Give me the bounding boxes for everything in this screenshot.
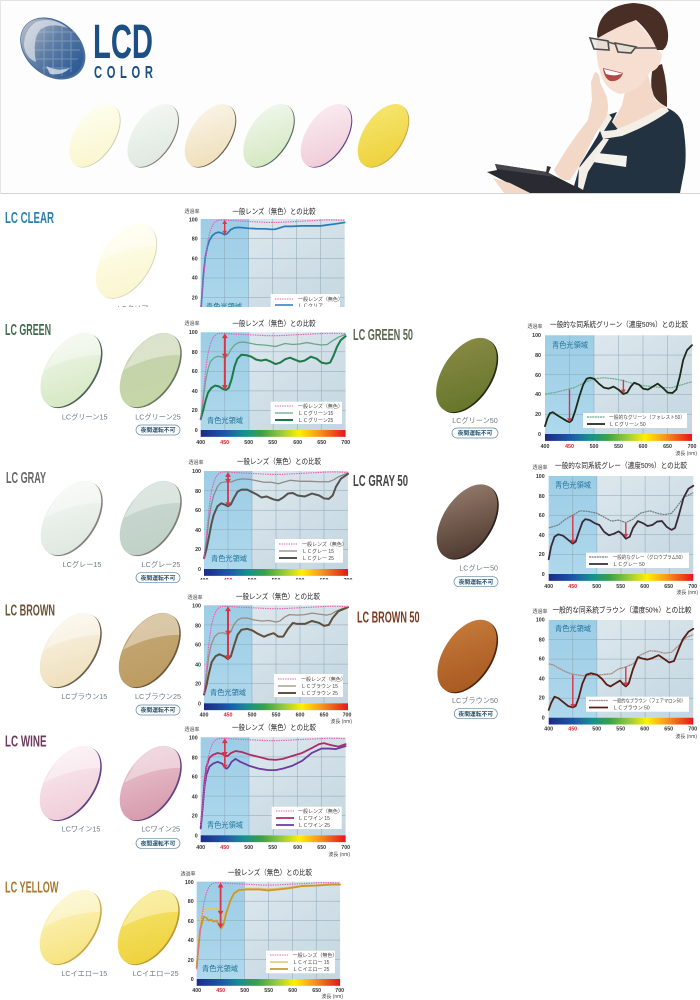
badge: no night driving: 夜間運転不可 (141, 574, 176, 582)
chart: LC brown comparison: 0 (198, 701, 201, 707)
chart: gray 50 comparison: 450 (568, 584, 577, 590)
lens label: LCイエロー15 (61, 969, 107, 978)
section: LC WINE (5, 723, 350, 858)
chart: gray 50 comparison: 400 (544, 584, 553, 590)
chart: gray 50 comparison: 一般的な同系統グレー（濃度50%）との比較 (555, 461, 688, 470)
chart: LC brown comparison: 450 (224, 712, 232, 718)
lens: green 25 (107, 322, 194, 419)
chart: green 50 comparison: 100 (532, 333, 541, 339)
chart: brown 50 comparison: 80 (539, 638, 545, 644)
chart: brown 50 comparison: 波長 (nm) (675, 733, 697, 740)
chart: LC wine comparison: 500 (244, 845, 253, 851)
chart: LC brown comparison: 40 (195, 662, 201, 668)
lens label: LCグレー15 (63, 560, 101, 569)
chart: gray 50 comparison: 一般的なグレー（グロウプラム50） (613, 554, 686, 561)
chart: LC green comparison: 40 (192, 389, 198, 395)
chart: LC green comparison: 一般レンズ（無色） (298, 403, 343, 410)
chart: LC wine comparison: 600 (293, 845, 302, 851)
chart: LC yellow comparison: 透過率 (180, 870, 196, 878)
chart: gray 50 comparison: 550 (616, 584, 625, 590)
chart: LC green comparison: 透過率 (184, 320, 200, 327)
heading: LC GRAY 50 (353, 473, 408, 490)
chart: LC brown comparison: 透過率 (187, 594, 203, 601)
chart: LC brown comparison: 一般レンズ（無色） (301, 676, 346, 683)
chart: LC gray comparison: 650 (320, 578, 328, 584)
chart: brown 50 comparison: 600 (640, 727, 649, 733)
chart: LC green comparison: 100 (189, 330, 198, 336)
chart: brown 50 comparison (532, 606, 697, 740)
heading: LC YELLOW (5, 880, 59, 896)
chart: LC wine comparison: 700 (341, 845, 350, 851)
chart: gray 50 comparison: 80 (539, 494, 545, 500)
chart: LC yellow comparison: 700 (335, 988, 344, 994)
chart: LC yellow comparison: 450 (216, 988, 225, 994)
chart: green 50 comparison: 600 (639, 444, 647, 450)
lens label: LCグレー50 (459, 564, 498, 572)
chart: green 50 comparison: 80 (535, 353, 541, 359)
chart: LC brown comparison: 650 (320, 712, 328, 718)
chart: LC gray comparison: ＬＣグレー 15 (302, 548, 334, 555)
chart: LC clear comparison: 一般レンズ（無色）との比較 (232, 207, 316, 216)
chart: LC yellow comparison: 100 (185, 880, 194, 886)
lens label: LCワイン25 (141, 824, 180, 834)
chart: LC brown comparison: 青色光領域 (210, 688, 246, 697)
chart: LC green comparison (184, 319, 350, 446)
lens: brown 25 (106, 602, 193, 699)
lens label: LCイエロー25 (133, 969, 179, 978)
logo: LCD COLOR (8, 5, 153, 92)
chart: LC brown comparison: ＬＣブラウン 25 (301, 690, 338, 697)
lens label: LCブラウン15 (61, 692, 107, 701)
chart: gray 50 comparison: ＬＣグレー 50 (613, 561, 645, 568)
chart: LC green comparison: 400 (196, 440, 205, 446)
chart: green 50 comparison: 波長 (nm) (675, 450, 697, 457)
chart: brown 50 comparison: 500 (592, 727, 601, 733)
lens: clear (83, 213, 170, 309)
chart: brown 50 comparison: 透過率 (532, 608, 548, 615)
photo: woman with glasses and tablet (487, 3, 686, 193)
chart: LC gray comparison (188, 457, 355, 586)
chart: LC yellow comparison (180, 868, 344, 1000)
chart: green 50 comparison: 一般的なグリーン（フォレスト50） (609, 414, 685, 421)
chart: green 50 comparison: 700 (688, 444, 696, 450)
chart: LC green comparison: 600 (293, 440, 302, 446)
lens label: LCグリーン15 (62, 412, 107, 422)
badge: no night driving: 夜間運転不可 (458, 710, 493, 718)
chart: gray 50 comparison: 500 (592, 584, 601, 590)
badge: no night driving: 夜間運転不可 (141, 426, 176, 434)
chart: LC wine comparison: 40 (192, 794, 198, 800)
section: LC GRAY (6, 457, 355, 586)
chart: brown 50 comparison: 650 (664, 727, 673, 733)
chart: LC yellow comparison: ＬＣイエロー 25 (292, 967, 330, 973)
chart: LC yellow comparison: 550 (264, 988, 273, 994)
chart: LC yellow comparison: 20 (188, 958, 194, 964)
chart: gray 50 comparison: 100 (536, 474, 545, 480)
chart: gray 50 comparison: 波長 (nm) (676, 589, 698, 596)
chart: LC gray comparison: 100 (192, 469, 201, 475)
chart: LC yellow comparison: 一般レンズ（無色） (292, 952, 337, 959)
section: LC GRAY 50 (353, 461, 698, 596)
chart: LC clear comparison: 80 (192, 236, 198, 242)
lens: yellow 25 (105, 879, 192, 976)
chart: LC brown comparison: 60 (195, 642, 201, 648)
chart: green 50 comparison: 60 (535, 373, 541, 379)
chart: green 50 comparison: 650 (663, 444, 672, 450)
lens: wine 25 (107, 735, 194, 832)
chart: brown 50 comparison: 700 (688, 727, 697, 733)
chart: LC green comparison: 650 (317, 440, 326, 446)
chart: LC clear comparison (184, 208, 346, 307)
chart: LC gray comparison: 青色光領域 (211, 554, 247, 563)
chart: gray 50 comparison: 0 (542, 572, 545, 578)
badge: no night driving: 夜間運転不可 (141, 706, 176, 714)
chart: LC gray comparison: ＬＣグレー 25 (302, 555, 334, 562)
chart: LC gray comparison: 550 (272, 578, 280, 584)
chart: LC green comparison: 一般レンズ（無色）との比較 (232, 319, 316, 328)
section: LC GREEN (5, 319, 350, 446)
chart: LC brown comparison: 700 (343, 712, 351, 718)
chart: green 50 comparison: ＬＣグリーン 50 (609, 421, 646, 428)
badge: no night driving (136, 425, 180, 435)
chart: brown 50 comparison: 0 (542, 716, 545, 722)
chart: green 50 comparison: 400 (541, 444, 549, 450)
chart: brown 50 comparison: ＬＣブラウン 50 (613, 704, 650, 712)
chart: LC green comparison: ＬＣグリーン25 (298, 417, 334, 424)
logo: LCD COLOR: COLOR (94, 62, 153, 83)
chart: green 50 comparison: 青色光領域 (552, 340, 588, 350)
chart: LC wine comparison: 青色光領域 (207, 820, 243, 830)
chart: green 50 comparison: 500 (590, 444, 598, 450)
chart: gray 50 comparison: 60 (539, 513, 545, 519)
hero banner (0, 0, 700, 194)
lens: brown 50 (425, 609, 510, 704)
chart: LC wine comparison: 550 (268, 845, 277, 851)
badge: no night driving: 夜間運転不可 (459, 578, 494, 586)
chart: brown 50 comparison: 一般的なブラウン（フェアマロン50） (613, 698, 686, 704)
lens: green 15 (28, 322, 115, 419)
chart: LC brown comparison: 400 (200, 712, 208, 718)
chart: LC wine comparison: 650 (317, 845, 326, 851)
badge: no night driving: 夜間運転不可 (458, 429, 493, 437)
chart: LC yellow comparison: ＬＣイエロー 15 (292, 960, 330, 966)
chart: gray 50 comparison: 650 (664, 584, 673, 590)
lens: gray 15 (28, 470, 115, 567)
chart: LC green comparison: 20 (192, 408, 198, 414)
chart: LC brown comparison: 100 (192, 603, 201, 609)
chart: LC wine comparison: 透過率 (184, 726, 200, 733)
chart: green 50 comparison: 20 (535, 412, 541, 418)
chart: LC yellow comparison: 60 (188, 919, 194, 925)
chart: LC brown comparison (187, 592, 352, 725)
chart: LC gray comparison: 700 (344, 578, 352, 584)
chart: gray 50 comparison: 40 (539, 533, 545, 539)
chart: LC yellow comparison: 0 (191, 977, 194, 983)
heading: LC GRAY (6, 470, 46, 487)
icon: lens sphere (8, 5, 98, 92)
chart: brown 50 comparison: 20 (539, 696, 545, 702)
chart: LC gray comparison: 0 (198, 567, 201, 573)
section: LC BROWN (5, 592, 352, 725)
chart: gray 50 comparison: 透過率 (532, 464, 548, 471)
lens label: LCクリア (118, 304, 148, 313)
chart: LC green comparison: ＬＣグリーン15 (298, 410, 334, 417)
heading: LC WINE (5, 734, 47, 750)
chart: LC clear comparison: 青色光領域 (206, 302, 242, 311)
chart: LC gray comparison: 400 (200, 578, 208, 584)
lens label: LCグレー25 (142, 560, 180, 569)
chart: brown 50 comparison: 450 (568, 727, 577, 733)
chart: LC clear comparison: 40 (192, 275, 198, 281)
chart: LC brown comparison: 550 (272, 712, 280, 718)
chart: LC yellow comparison: 80 (188, 899, 194, 905)
badge: no night driving: 夜間運転不可 (141, 840, 176, 848)
heading: LC GREEN 50 (353, 327, 413, 344)
chart: LC wine comparison: 400 (196, 845, 205, 851)
chart: LC wine comparison: 100 (189, 735, 198, 741)
chart: LC wine comparison: 80 (192, 755, 198, 761)
chart: LC green comparison: 550 (268, 440, 277, 446)
heading: LC BROWN 50 (357, 610, 420, 626)
chart: LC clear comparison: 一般レンズ（無色） (298, 296, 343, 303)
lens label: LCグリーン25 (135, 412, 181, 422)
chart: LC green comparison: 青色光領域 (207, 416, 243, 425)
chart: green 50 comparison: 透過率 (527, 323, 543, 330)
lens label: LCワイン15 (62, 824, 100, 834)
chart: LC brown comparison: ＬＣブラウン 15 (301, 683, 338, 690)
badge: no night driving (136, 838, 180, 848)
chart: brown 50 comparison: 40 (539, 677, 545, 683)
chart: LC yellow comparison: 青色光領域 (202, 964, 238, 973)
chart: LC wine comparison: ＬＣワイン 15 (298, 816, 330, 822)
heading: LC CLEAR (5, 210, 54, 227)
chart: LC wine comparison: 波長 (nm) (328, 851, 350, 858)
chart: LC wine comparison: 60 (192, 774, 198, 780)
chart: LC clear comparison: 20 (192, 295, 198, 301)
chart: LC green comparison: 700 (341, 440, 350, 446)
badge: no night driving (454, 709, 497, 719)
chart: LC wine comparison: 0 (195, 833, 198, 839)
chart: LC gray comparison: 60 (195, 508, 201, 514)
chart: gray 50 comparison: 700 (688, 584, 697, 590)
badge: no night driving (136, 705, 180, 715)
lens: gray 50 (424, 474, 511, 570)
section: LC YELLOW (5, 868, 344, 1000)
chart: LC gray comparison: 20 (195, 547, 201, 553)
section: LC GREEN 50 (353, 320, 697, 457)
chart: LC clear comparison: 100 (189, 217, 198, 223)
chart: gray 50 comparison: 青色光領域 (555, 480, 591, 490)
chart: LC wine comparison: 一般レンズ（無色） (298, 808, 343, 815)
badge: no night driving (452, 428, 498, 438)
chart: LC gray comparison: 40 (195, 528, 201, 534)
chart: LC yellow comparison: 650 (312, 988, 321, 994)
lens: yellow 15 (27, 879, 114, 976)
chart: LC gray comparison: 一般レンズ（無色）との比較 (237, 457, 322, 466)
lens label: LCグリーン50 (452, 416, 498, 425)
chart: brown 50 comparison: 400 (544, 727, 553, 733)
chart: LC wine comparison (184, 723, 350, 858)
chart: LC gray comparison: 450 (224, 578, 232, 584)
chart: LC gray comparison: 一般レンズ（無色） (302, 541, 347, 548)
badge: no night driving (136, 573, 180, 583)
chart: LC wine comparison: 20 (192, 813, 198, 819)
chart: LC gray comparison: 500 (248, 578, 256, 584)
chart: LC clear comparison: ＬＣクリア (298, 304, 323, 310)
lens label: LCブラウン25 (135, 692, 181, 701)
chart: LC gray comparison: 透過率 (188, 459, 204, 466)
chart: brown 50 comparison: 60 (539, 657, 545, 663)
chart: LC wine comparison: ＬＣワイン 25 (298, 823, 330, 829)
lens: wine 15 (27, 735, 114, 832)
chart: LC green comparison: 500 (244, 440, 253, 446)
chart: green 50 comparison: 450 (565, 444, 574, 450)
chart: LC wine comparison: 一般レンズ（無色）との比較 (232, 723, 317, 732)
chart: LC clear comparison: 透過率 (184, 208, 200, 215)
chart: LC green comparison: 0 (195, 428, 198, 434)
chart: green 50 comparison: 550 (614, 444, 623, 450)
chart: LC yellow comparison: 40 (188, 938, 194, 944)
chart: LC green comparison: 60 (192, 369, 198, 375)
chart: green 50 comparison (527, 320, 697, 457)
lens: gray 25 (107, 470, 194, 567)
chart: gray 50 comparison: 600 (640, 584, 649, 590)
chart: green 50 comparison: 40 (535, 392, 541, 398)
heading: LC GREEN (5, 322, 51, 339)
chart: LC yellow comparison: 波長 (nm) (321, 993, 343, 1000)
heading: LC BROWN (5, 602, 55, 620)
chart: LC yellow comparison: 500 (240, 988, 249, 994)
section: LC BROWN 50 (357, 606, 697, 740)
chart: green 50 comparison: 0 (538, 432, 541, 438)
chart: LC brown comparison: 波長 (nm) (330, 718, 352, 725)
section: LC CLEAR (6, 208, 346, 307)
chart: brown 50 comparison: 550 (616, 727, 625, 733)
chart: LC brown comparison: 500 (248, 712, 256, 718)
lens: green 50 (424, 327, 511, 424)
chart: LC yellow comparison: 一般レンズ（無色）との比較 (228, 868, 313, 877)
chart: LC wine comparison: 450 (220, 845, 229, 851)
chart: LC gray comparison: 80 (195, 489, 201, 495)
chart: LC yellow comparison: 600 (288, 988, 297, 994)
chart: LC clear comparison: 60 (192, 256, 198, 262)
chart: LC green comparison: 80 (192, 350, 198, 356)
chart: LC green comparison: 450 (220, 440, 229, 446)
chart: LC brown comparison: 一般レンズ（無色）との比較 (236, 592, 321, 601)
hero lens row (59, 95, 420, 176)
chart: brown 50 comparison: 100 (536, 618, 545, 624)
badge: no night driving (454, 577, 498, 587)
chart: LC brown comparison: 600 (296, 712, 304, 718)
chart: gray 50 comparison: 20 (539, 552, 545, 558)
chart: LC brown comparison: 80 (195, 623, 201, 629)
lens label: LCブラウン50 (452, 696, 498, 705)
logo: LCD COLOR: LCD (93, 16, 153, 69)
lens: brown 15 (27, 602, 114, 699)
chart: LC brown comparison: 20 (195, 681, 201, 687)
chart: brown 50 comparison: 青色光領域 (555, 624, 591, 633)
chart: LC yellow comparison: 400 (192, 988, 201, 994)
chart: gray 50 comparison (532, 461, 698, 596)
chart: LC gray comparison: 600 (296, 578, 304, 584)
